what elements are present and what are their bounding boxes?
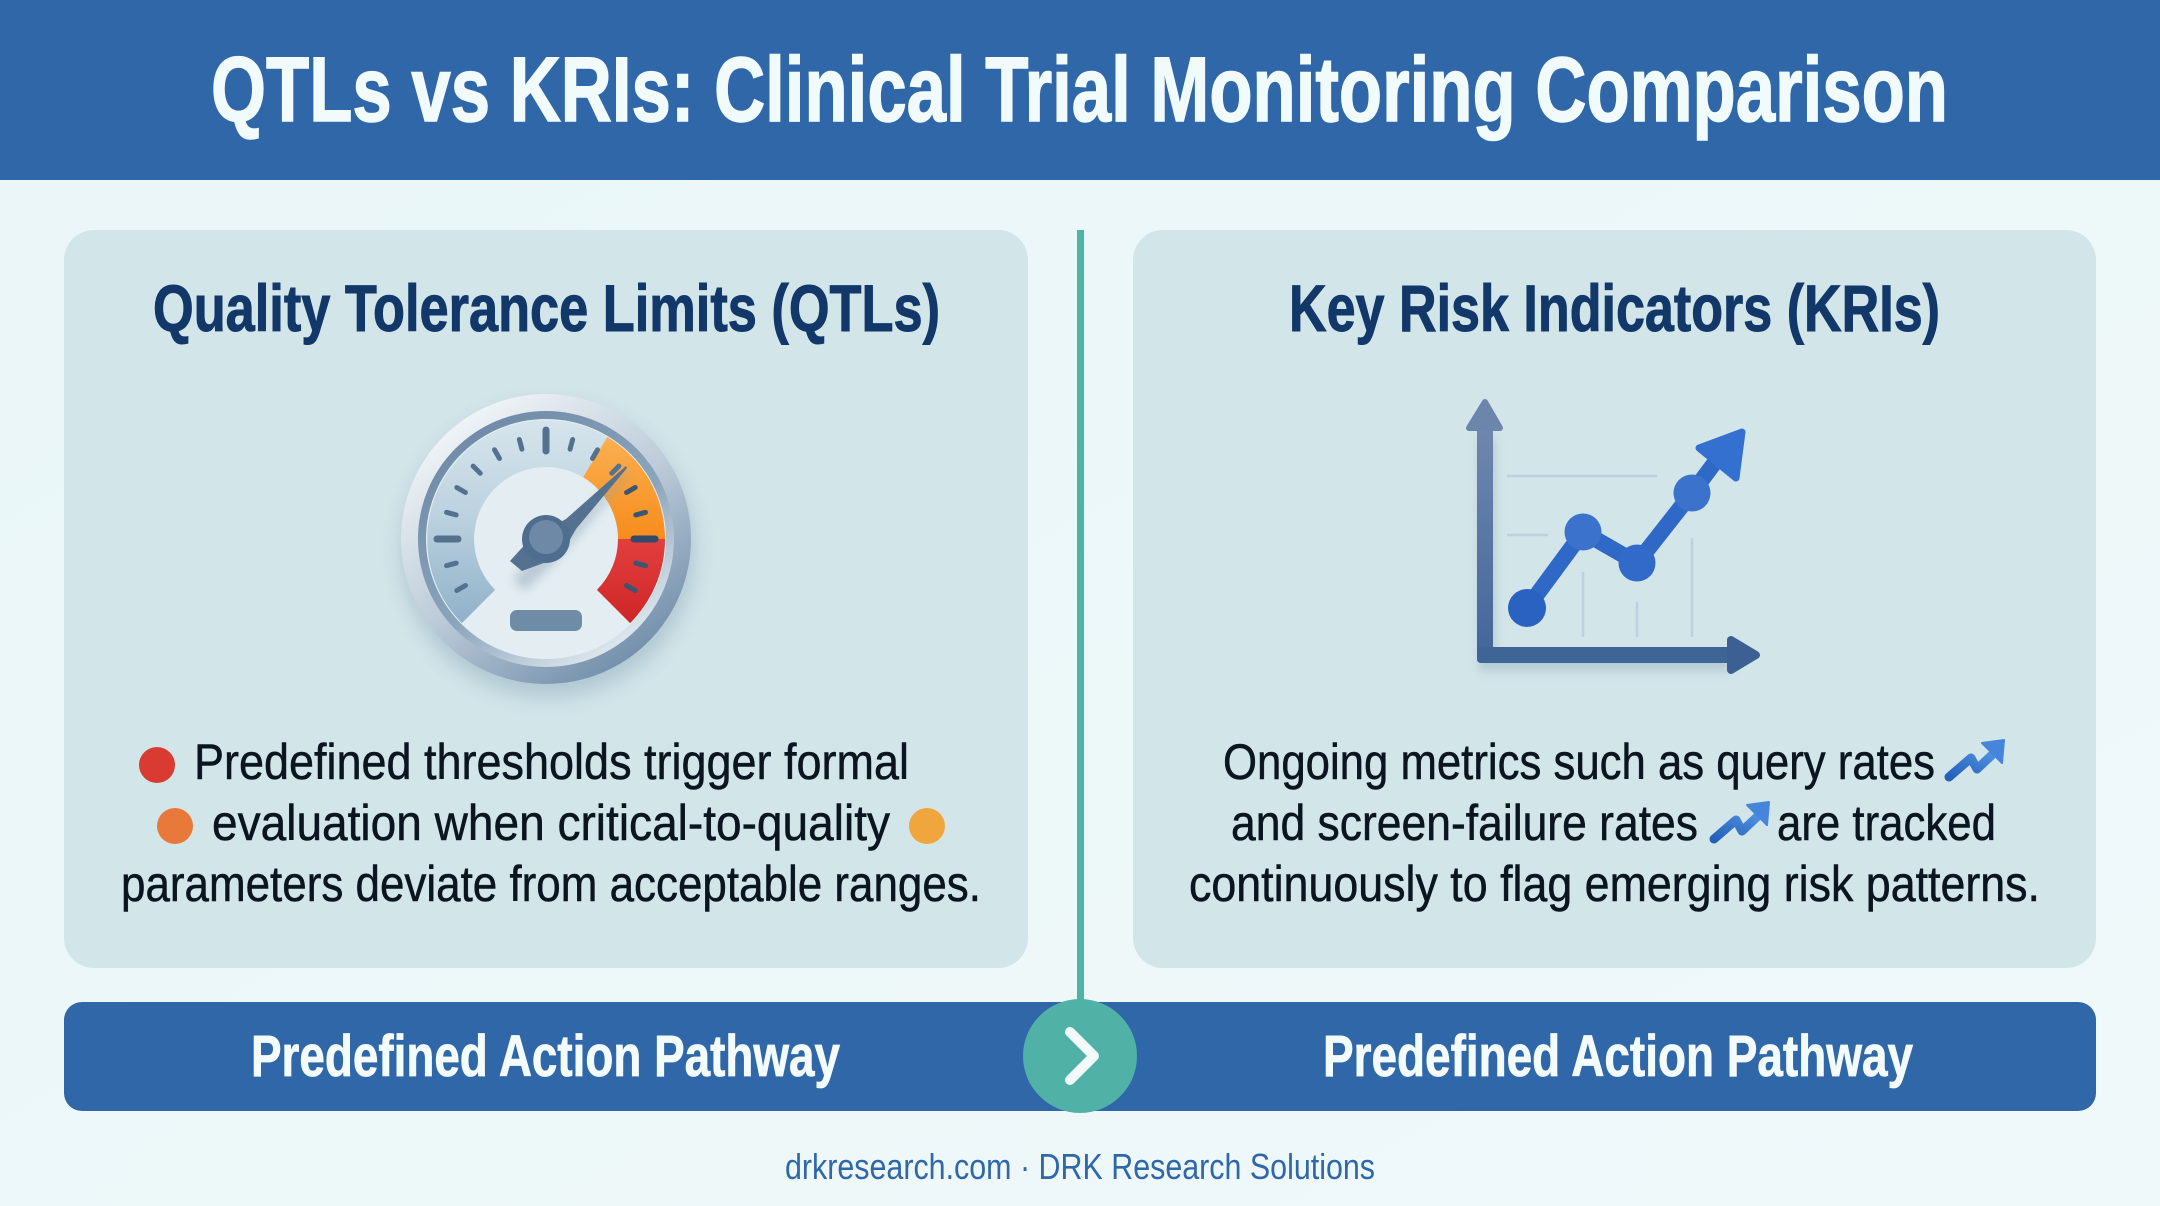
body text: QTLs description: Predefined thresholds trigger formal (194, 734, 909, 790)
bullet: amber dot (909, 808, 945, 844)
body text: KRIs description: are tracked (1777, 795, 1996, 851)
header banner (0, 0, 2160, 180)
panel: Quality Tolerance Limits (64, 230, 1028, 968)
icon: small rising arrow (1949, 740, 2004, 777)
center divider line (1077, 230, 1084, 1005)
footer credit: drkresearch.com · DRK Research Solutions (785, 1146, 1375, 1187)
body text: KRIs description: Ongoing metrics such as query rates (1223, 734, 1935, 790)
icon: line chart with rising arrow (1469, 402, 1756, 670)
bar label: left: Predefined Action Pathway (251, 1024, 840, 1089)
bar label: right: Predefined Action Pathway (1323, 1024, 1913, 1089)
arrow button (1023, 999, 1137, 1113)
action pathway bar (64, 1002, 2096, 1111)
body text: KRIs description: and screen-failure rates (1231, 795, 1698, 851)
body text: KRIs description: continuously to flag emerging risk patterns. (1189, 856, 2040, 912)
body text: KRIs description (1189, 734, 2040, 912)
bullet: red dot (139, 747, 175, 783)
body text: QTLs description (121, 734, 981, 912)
panel heading: QTLs: Quality Tolerance Limits (QTLs) (153, 271, 940, 345)
panel heading: KRIs: Key Risk Indicators (KRIs) (1289, 271, 1940, 345)
panel: Key Risk Indicators (1133, 230, 2096, 968)
body text: QTLs description: evaluation when critical-to-quality (212, 795, 890, 851)
icon: small rising arrow (1714, 802, 1769, 839)
bullet: orange dot (157, 808, 193, 844)
icon: speedometer gauge (401, 394, 695, 698)
body text: QTLs description: parameters deviate from acceptable ranges. (121, 856, 981, 912)
